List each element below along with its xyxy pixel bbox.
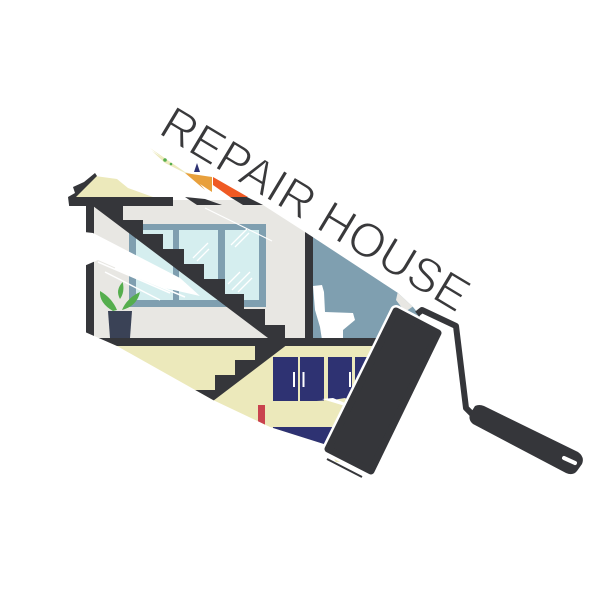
paint roller xyxy=(327,310,583,477)
roller base strip xyxy=(327,459,362,477)
lower floor wall xyxy=(108,342,372,462)
toilet xyxy=(313,285,355,340)
brush stroke over cabinets xyxy=(317,398,346,401)
bathroom divider wall xyxy=(305,225,313,340)
upper staircase xyxy=(93,206,285,346)
lower cabinet xyxy=(273,427,332,444)
roller drum xyxy=(328,311,438,471)
thin window streaks xyxy=(98,262,185,300)
upper paint sliver xyxy=(150,148,263,205)
floor beam xyxy=(86,338,386,346)
bathroom wall xyxy=(310,235,420,338)
grey wall tail xyxy=(396,293,412,310)
handle hole xyxy=(564,458,575,463)
handle grip xyxy=(469,405,583,474)
white brush stroke left xyxy=(84,232,200,296)
painted house scene xyxy=(68,197,420,462)
upper room wall xyxy=(86,200,308,340)
window xyxy=(129,224,266,307)
upper cabinets xyxy=(273,357,367,401)
potted plant xyxy=(100,282,140,338)
roller arm xyxy=(417,310,472,414)
red fridge xyxy=(258,405,265,427)
title: REPAIR HOUSE xyxy=(151,97,479,323)
thin white tail on wall xyxy=(205,208,272,241)
lower staircase xyxy=(195,344,288,402)
illustration: repair house xyxy=(68,108,583,478)
roof paint fragment xyxy=(68,173,153,197)
roller halo xyxy=(328,311,438,471)
ceiling beam xyxy=(68,197,173,206)
left wall xyxy=(86,200,94,340)
